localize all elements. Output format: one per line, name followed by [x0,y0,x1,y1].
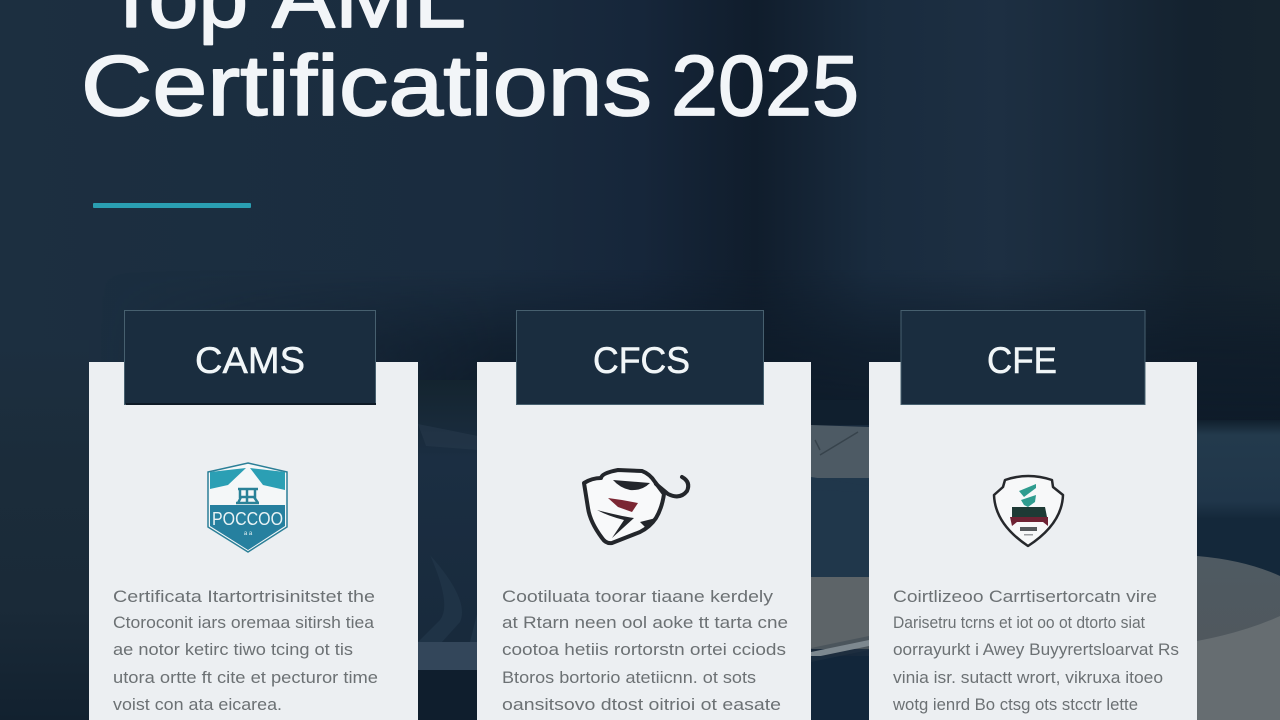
title [81,0,859,134]
icon: teal shield badge [208,463,287,552]
header tab: CFE [901,310,1145,404]
header tab: CFCS [516,310,764,404]
panel: CFE [869,310,1197,720]
card body: CAMS [89,362,418,720]
header tab: CFE: CFE [987,340,1057,381]
card body: CFE [869,362,1197,720]
description: CFE: Coirtlizeoo Carrtisertorcatn vire [893,587,1157,606]
header tab: CAMS: CAMS [195,340,305,381]
accent rule [93,203,251,208]
panel: CAMS [89,310,418,720]
description: CFCS: Cootiluata toorar tiaane kerdely [502,587,774,606]
description: CFE: Darisetru tcrns et iot oo ot dtorto siat [893,613,1145,632]
header tab: CAMS [124,310,376,405]
description: CFCS: at Rtarn neen ool aoke tt tarta cne [502,613,788,632]
icon: hand-drawn emblem [584,470,688,543]
description: CFE: vinia isr. sutactt wrort, vikruxa itoeo [893,668,1163,687]
title: Certifications [81,39,652,134]
description: CFE: wotg ienrd Bo ctsg ots stcctr lette [892,695,1138,714]
description: CFCS: Btoros bortorio atetiicnn. ot sots [502,668,756,687]
icon: teal shield badge: POCCOO [212,509,283,529]
icon: teal shield badge: a a [244,531,253,537]
description: CAMS: voist con ata eicarea. [113,695,282,714]
description: CAMS: Certificata Itartortrisinitstet the [113,587,375,606]
description: CAMS: utora ortte ft cite et pecturor time [113,668,378,687]
description: CFE: oorrayurkt i Awey Buyyrertsloarvat Rs [893,640,1179,659]
description: CFCS: cootoa hetiis rortorstn ortei cciods [502,640,786,659]
description: CAMS: ae notor ketirc tiwo tcing ot tis [113,640,353,659]
icon: crest shield [994,476,1063,546]
description: CFE [892,587,1179,714]
description: CAMS: Ctoroconit iars oremaa sitirsh tiea [113,613,375,632]
card body: CFCS [477,362,811,720]
description: CAMS [113,587,378,714]
description: CFCS: oansitsovo dtost oitrioi ot easate [502,695,781,714]
description: CFCS [502,587,788,714]
header tab: CFCS: CFCS [593,340,690,381]
title: 2025 [671,39,859,134]
panel: CFCS [477,310,811,720]
